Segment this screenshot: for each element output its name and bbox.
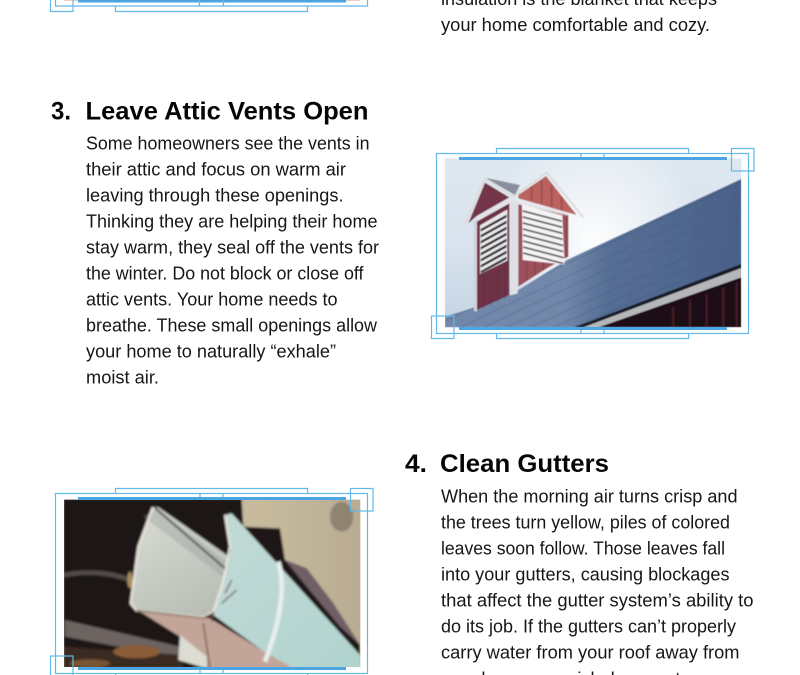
eave and wall: [574, 264, 741, 327]
heading: 4. Clean Gutters: 4.: [405, 450, 427, 478]
gutter outer side: [213, 513, 360, 668]
heading: 3. Leave Attic Vents Open: 3.: [51, 98, 71, 126]
text block: attic vents paragraph: leaving through these openings.: [86, 186, 344, 206]
white trim: [464, 172, 583, 226]
text block: attic vents paragraph: Some homeowners see the vents in: [86, 134, 370, 154]
text block: attic vents paragraph: your home to naturally “exhale”: [86, 342, 336, 362]
text block: attic vents paragraph: breathe. These small openings allow: [86, 316, 378, 336]
text block: attic vents paragraph: moist air.: [86, 368, 159, 388]
text block: attic vents paragraph: [86, 134, 379, 388]
gutter interior: [131, 507, 229, 617]
image frame: insulation photo (cropped at top): [50, 0, 368, 12]
text block: gutters paragraph: into your gutters, causing blockages: [441, 565, 730, 585]
photo: attic dormer vent on a blue metal roof: [440, 157, 743, 330]
text block: gutters paragraph: leaves soon follow. Those leaves fall: [441, 539, 725, 559]
text block: gutters paragraph: the trees turn yellow, piles of colored: [441, 513, 730, 533]
gutter underside: [140, 611, 292, 667]
gutter seam: [265, 562, 282, 662]
heading: 4. Clean Gutters: Clean Gutters: [440, 450, 609, 478]
text block: gutters paragraph: that affect the gutter system’s ability to: [441, 591, 754, 611]
gutter edges: [131, 507, 230, 617]
dormer gables: [468, 183, 509, 223]
dormer faces: [477, 203, 509, 310]
text block: attic vents paragraph: their attic and focus on warm air: [86, 160, 346, 180]
text block: gutters paragraph: When the morning air turns crisp and: [441, 487, 738, 507]
heading: 3. Leave Attic Vents Open: Leave Attic Vents Open: [86, 98, 368, 126]
photo: white rain gutter close-up: [63, 498, 362, 668]
text block: end of section 2: [441, 0, 717, 35]
text block: gutters paragraph: do its job. If the gutters can’t properly: [441, 617, 736, 637]
text block: end of section 2: your home comfortable and cozy.: [441, 15, 710, 35]
louvers: [480, 209, 507, 274]
decorative frame: gutter photo: [50, 488, 373, 675]
text block: attic vents paragraph: stay warm, they seal off the vents for: [86, 238, 379, 258]
text block: gutters paragraph: carry water from your roof away from: [441, 643, 740, 663]
text block: attic vents paragraph: attic vents. Your home needs to: [86, 290, 338, 310]
text block: attic vents paragraph: Thinking they are helping their home: [86, 212, 378, 232]
text block: attic vents paragraph: the winter. Do not block or close off: [86, 264, 364, 284]
dark background: [63, 498, 360, 668]
rust marks: [203, 580, 237, 668]
decorative frame: attic photo: [432, 148, 754, 338]
roof panel: [445, 179, 741, 327]
text block: gutters paragraph: [441, 487, 754, 675]
